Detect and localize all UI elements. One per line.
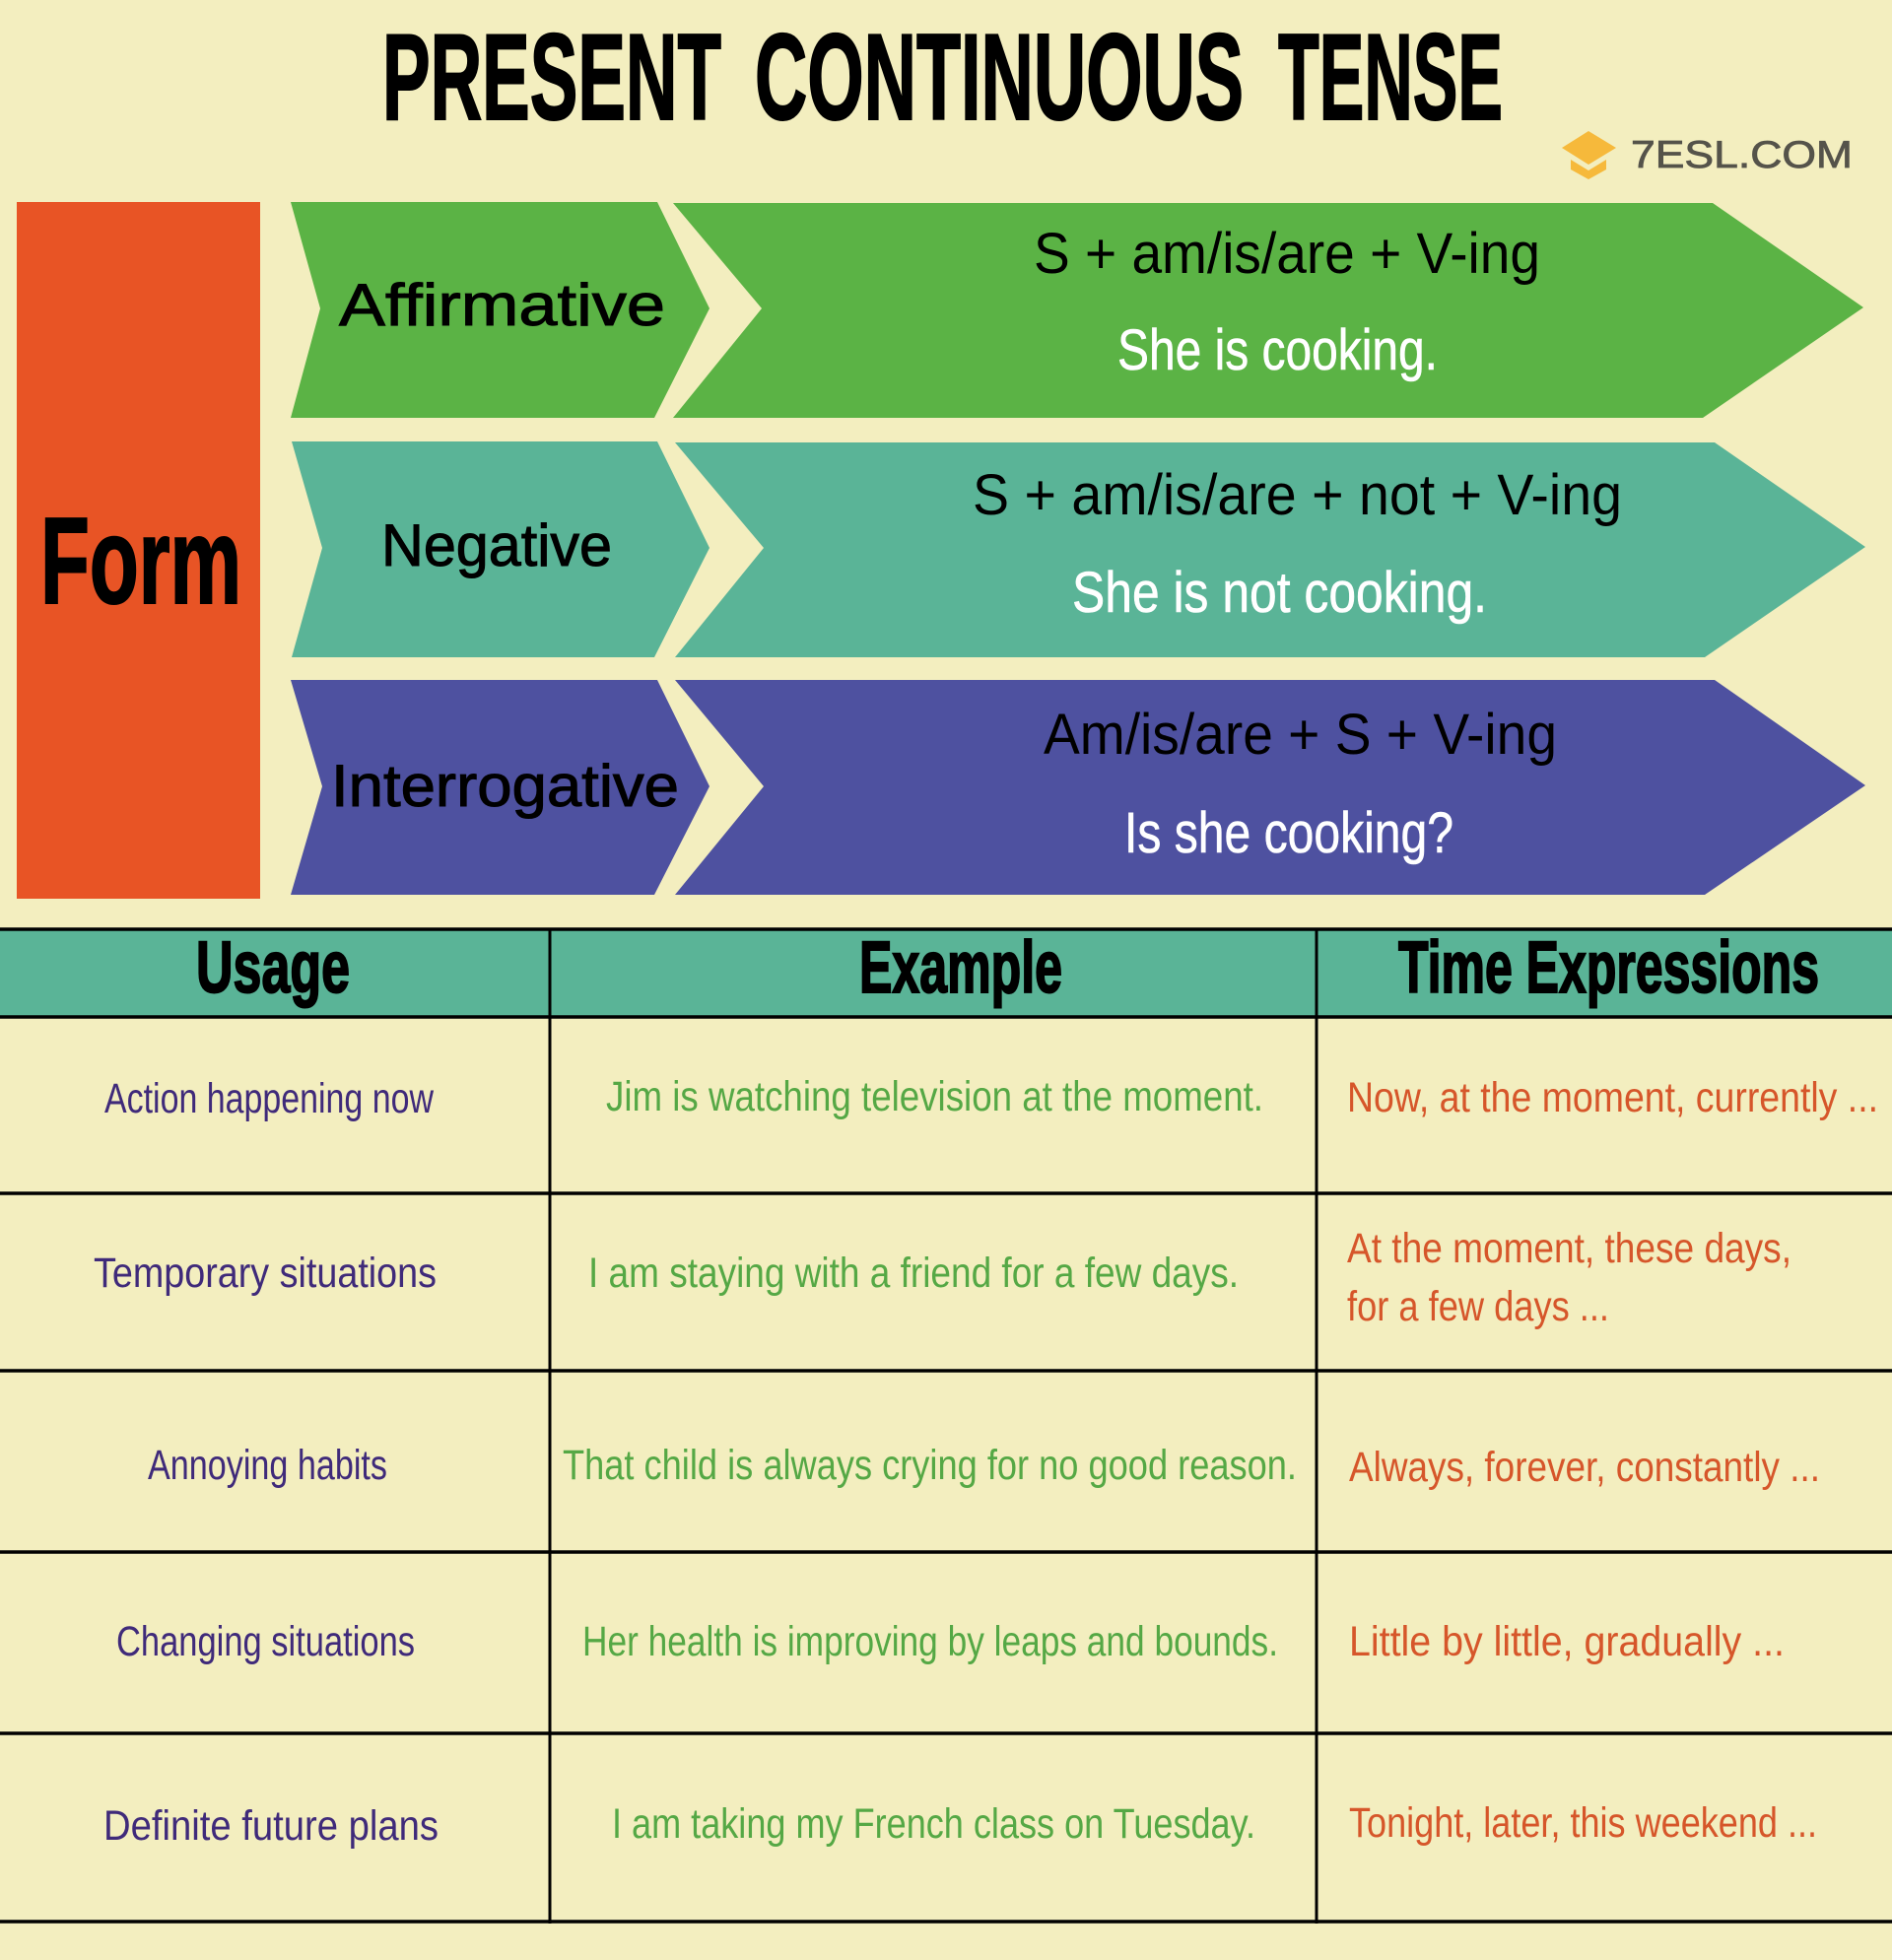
time expressions: At the moment, these days, bbox=[1347, 1225, 1791, 1272]
example: Her health is improving by leaps and bounds. bbox=[582, 1618, 1278, 1665]
time expressions: Always, forever, constantly ... bbox=[1349, 1444, 1820, 1491]
time expressions: for a few days ... bbox=[1347, 1283, 1609, 1330]
formula: interrogative: Am/is/are + S + V-ing bbox=[1044, 703, 1557, 767]
panel: interrogative row bbox=[291, 680, 1865, 895]
panel: form label bbox=[17, 202, 260, 899]
heading: Usage: Usage bbox=[196, 926, 350, 1008]
table bbox=[0, 926, 1892, 1924]
formula: affirmative: S + am/is/are + V-ing bbox=[1034, 222, 1540, 286]
panel: negative row bbox=[292, 441, 1865, 657]
example: affirmative: She is cooking. bbox=[1117, 318, 1438, 382]
formula: negative: S + am/is/are + not + V-ing bbox=[973, 463, 1622, 527]
table row: changing situations bbox=[116, 1618, 1785, 1665]
usage: Action happening now bbox=[104, 1075, 435, 1122]
label: Interrogative: Interrogative bbox=[331, 753, 679, 819]
time expressions: Little by little, gradually ... bbox=[1349, 1618, 1785, 1665]
heading: Example: Example bbox=[859, 926, 1062, 1008]
usage: Temporary situations bbox=[94, 1250, 437, 1297]
chevron: Affirmative bbox=[291, 202, 710, 418]
panel: affirmative row bbox=[291, 202, 1863, 418]
table row: definite future plans bbox=[103, 1799, 1817, 1850]
title bbox=[382, 10, 1503, 146]
chevron: Interrogative bbox=[291, 680, 710, 895]
title: TENSE bbox=[1278, 10, 1503, 146]
title: PRESENT bbox=[382, 10, 721, 146]
example: interrogative: Is she cooking? bbox=[1124, 801, 1453, 865]
usage: Annoying habits bbox=[148, 1442, 387, 1489]
chevron: Negative bbox=[292, 441, 710, 657]
arrow: affirmative formula bbox=[673, 203, 1863, 418]
logo text: 7ESL.COM bbox=[1631, 134, 1853, 176]
label: Affirmative: Affirmative bbox=[339, 272, 665, 338]
table header bbox=[0, 926, 1892, 1017]
arrow: interrogative formula bbox=[675, 680, 1865, 895]
time expressions bbox=[1347, 1225, 1791, 1330]
usage: Definite future plans bbox=[103, 1802, 439, 1850]
usage: Changing situations bbox=[116, 1618, 415, 1665]
arrow: negative formula bbox=[675, 442, 1865, 657]
example: negative: She is not cooking. bbox=[1072, 561, 1487, 625]
example: Jim is watching television at the moment. bbox=[606, 1073, 1263, 1120]
title: CONTINUOUS bbox=[755, 10, 1244, 146]
table row: action happening now bbox=[104, 1073, 1878, 1122]
label: Negative: Negative bbox=[381, 512, 612, 578]
table row: temporary situations bbox=[94, 1225, 1791, 1330]
table row: annoying habits bbox=[148, 1442, 1820, 1491]
example: I am staying with a friend for a few days. bbox=[588, 1250, 1239, 1297]
logo: 7ESL.COM bbox=[1562, 131, 1853, 179]
example: I am taking my French class on Tuesday. bbox=[612, 1800, 1255, 1848]
time expressions: Tonight, later, this weekend ... bbox=[1349, 1799, 1817, 1847]
example: That child is always crying for no good reason. bbox=[563, 1442, 1297, 1489]
heading: Form: Form bbox=[40, 494, 241, 630]
icon: graduation cap bbox=[1562, 131, 1616, 179]
